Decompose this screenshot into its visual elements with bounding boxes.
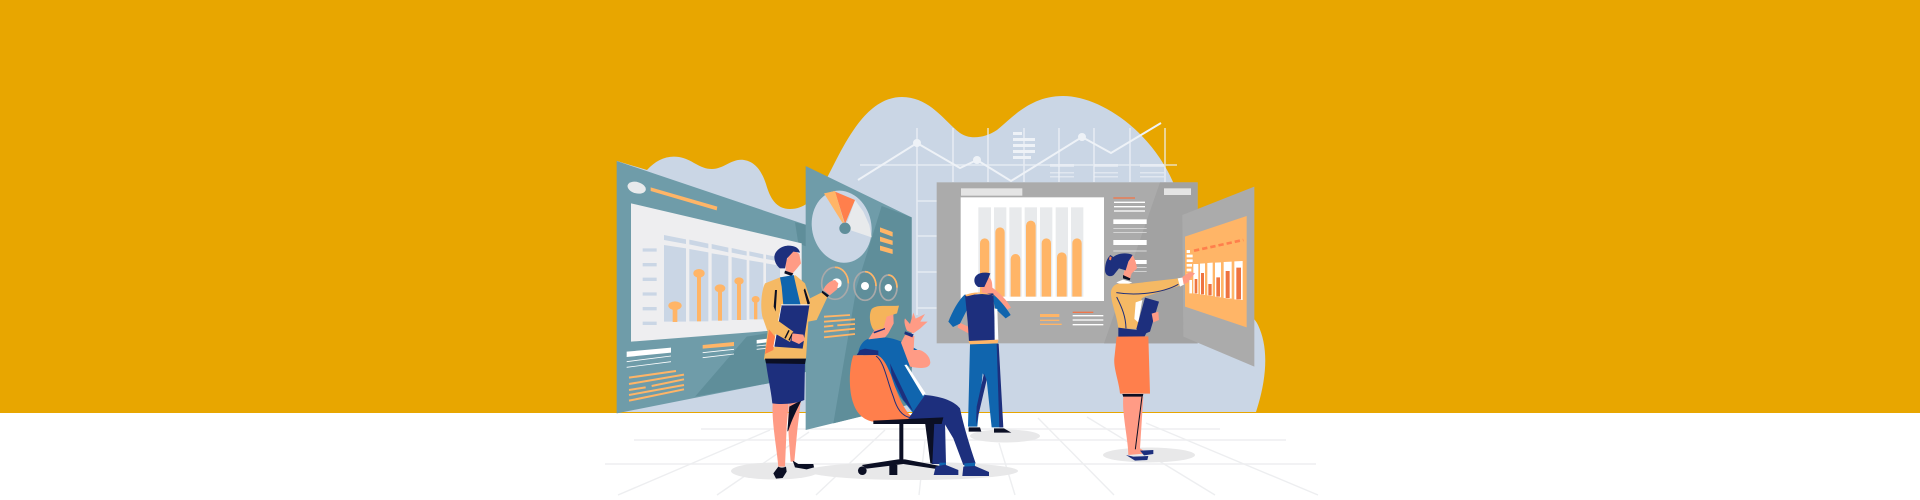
arm and hand: [901, 335, 930, 368]
bar chart: [961, 197, 1104, 301]
line chart behind screens: [858, 123, 1177, 315]
person: woman with folder by left screen: [761, 246, 838, 479]
dashed trend line: [1194, 240, 1243, 251]
head: [868, 314, 894, 339]
floor tile grid: [605, 417, 1318, 495]
ring indicators: [822, 267, 897, 300]
screen with lollipop chart: [631, 203, 802, 342]
chair and seated man: [850, 306, 989, 476]
panel: middle teal dashboard: [805, 166, 912, 430]
chair seat: [873, 417, 943, 424]
upper leg: [908, 395, 976, 465]
panel: right grey screen: [1182, 187, 1254, 367]
chair base: [858, 423, 943, 475]
small legend bars: [880, 227, 893, 254]
person: woman with folder pointing at screen: [1105, 253, 1195, 461]
panel: left teal dashboard: [617, 161, 807, 413]
side text lines: [1040, 197, 1147, 325]
panel: central grey screen: [937, 182, 1198, 343]
torso: [858, 337, 925, 413]
white floor: [0, 413, 1920, 500]
lower leg: [925, 422, 946, 464]
chair back: [850, 355, 940, 422]
floor shadows: [731, 430, 1195, 480]
pie gauge: [805, 185, 878, 268]
person: standing man from behind: [948, 273, 1011, 433]
greeked captions: [627, 338, 770, 401]
orange text lines: [824, 315, 855, 337]
background blob: [617, 96, 1265, 412]
mini bar chart: [1187, 250, 1243, 300]
